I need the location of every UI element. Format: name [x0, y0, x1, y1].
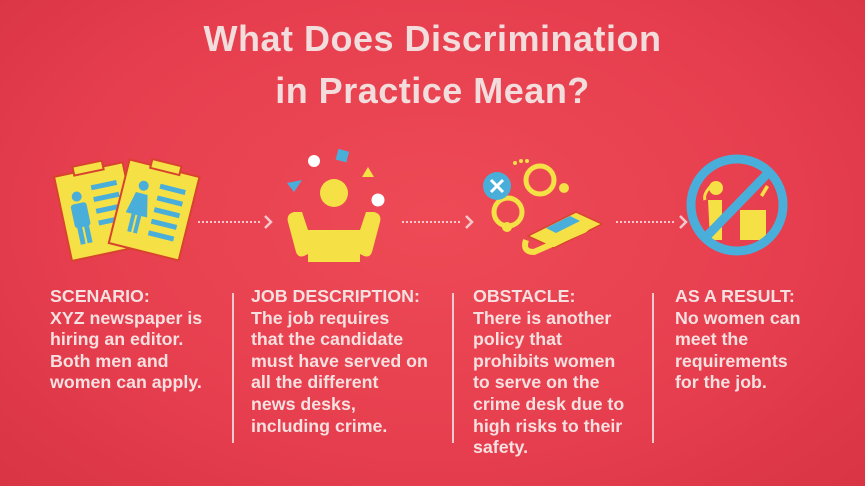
panel: obstacle: safety.: [473, 437, 528, 457]
panel: scenario: Both men and: [50, 351, 169, 371]
panel: scenario: women can apply.: [50, 372, 202, 392]
icon: juggling person: [287, 149, 384, 262]
title: What Does Discrimination: [203, 18, 662, 59]
panel: job description: [251, 286, 428, 436]
panel: job description: The job requires: [251, 308, 389, 328]
panel: scenario: hiring an editor.: [50, 329, 183, 349]
panel: obstacle: prohibits women: [473, 351, 615, 371]
panel: result: No women can: [675, 308, 800, 328]
panel: job description: including crime.: [251, 416, 387, 436]
icon: clipboards: [53, 154, 201, 261]
panel: job description: all the different: [251, 372, 378, 392]
panel: obstacle: to serve on the: [473, 372, 599, 392]
panel: obstacle: policy that: [473, 329, 562, 349]
panel: result: [675, 286, 800, 392]
arrow 1: [198, 216, 271, 228]
panel: obstacle: OBSTACLE:: [473, 286, 575, 306]
panel: obstacle: crime desk due to: [473, 394, 624, 414]
panel: job description: that the candidate: [251, 329, 403, 349]
panel: result: AS A RESULT:: [675, 286, 795, 306]
title: [203, 18, 662, 111]
panel: scenario: [50, 286, 202, 392]
panel: job description: must have served on: [251, 351, 428, 371]
panel: result: for the job.: [675, 372, 767, 392]
panel: job description: news desks,: [251, 394, 356, 414]
icon: prohibited woman at desk: [691, 159, 783, 251]
arrow 2: [402, 216, 472, 228]
panel: obstacle: There is another: [473, 308, 611, 328]
panel: scenario: XYZ newspaper is: [50, 308, 202, 328]
arrow 3: [616, 216, 686, 228]
panel: job description: JOB DESCRIPTION:: [251, 286, 420, 306]
panel: obstacle: [473, 286, 624, 457]
panel: result: requirements: [675, 351, 788, 371]
panel: result: meet the: [675, 329, 748, 349]
title: in Practice Mean?: [275, 70, 590, 111]
icon: handcuffs and newspaper: [483, 159, 602, 252]
panel: obstacle: high risks to their: [473, 416, 622, 436]
panel: scenario: SCENARIO:: [50, 286, 150, 306]
